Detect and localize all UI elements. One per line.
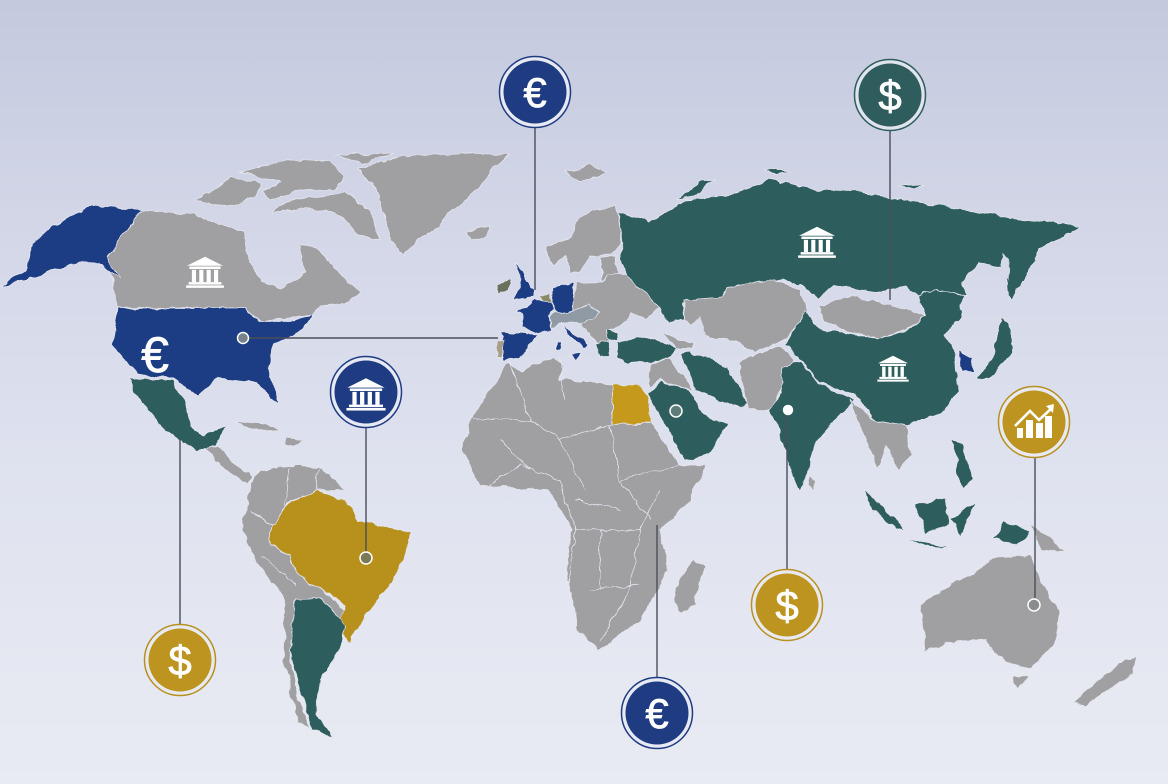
country: Egypt [612,384,652,424]
country: Greenland [358,153,511,256]
African borders [472,358,680,640]
country: China [785,288,965,425]
country: Madagascar [674,560,704,614]
Central Europe [549,305,600,330]
icon: bank on Canada [186,257,224,288]
country: Iran [680,352,747,408]
Sri Lanka [808,475,816,490]
region: North America [0,153,511,484]
country: France [517,300,555,333]
badge: euro bottom: € [645,690,669,737]
continent: Africa [462,358,706,650]
Portugal [497,340,505,358]
Eastern Europe [572,275,658,345]
country: Alaska [0,206,143,287]
Sakhalin gap [1002,252,1009,282]
country: Russia [618,180,1080,322]
region: Oceania [920,555,1136,705]
country: Indonesia [864,490,1030,548]
country: Spain [499,332,538,362]
country: Japan [976,318,1012,380]
country: Turkey [617,337,677,363]
countries: northern and western South America [242,465,346,728]
region: Europe [497,165,693,363]
badge: euro top: € [523,69,547,116]
country: India [768,362,855,492]
country: Mongolia [820,296,925,338]
Russian Arctic islands [678,168,925,200]
Southeast Asia [850,400,912,470]
region: South America [242,465,410,738]
Papua New Guinea [1030,525,1064,552]
connector lines [180,126,1035,678]
Philippines [950,436,974,488]
Caspian Sea gap [688,315,712,360]
icon: euro on USA: € [141,327,169,383]
badge: growth chart [998,386,1070,458]
country: Brazil [270,490,410,642]
badge: dollar left [144,624,216,696]
badge: euro bottom [622,678,692,748]
badge: bank [330,356,402,428]
badge: dollar top [854,60,926,130]
country: Australia [920,555,1060,668]
country: Argentina [290,598,346,738]
Afghanistan and Pakistan [738,345,795,412]
country: Saudi Arabia [647,382,730,460]
country: Korea [958,352,974,372]
Greece and Balkans [595,330,620,357]
Central America and Caribbean [205,420,302,484]
Caucasus [663,332,693,350]
region: Asia [618,168,1080,552]
country: Iceland [566,165,606,182]
icon: bank on Russia [798,227,836,258]
Scandinavia [547,205,622,275]
country: New Zealand [1074,655,1136,705]
region: Africa [462,358,706,650]
country: Canada [107,210,360,322]
South American borders [250,467,320,585]
badge: dollar centre: $ [775,582,799,629]
Benelux [540,294,551,304]
Canadian Arctic islands [195,153,490,240]
badge: dollar centre [752,570,822,640]
badge: dollar left: $ [168,637,192,684]
country: United Kingdom [513,263,534,300]
country: Italy [556,323,588,360]
Ireland [497,279,510,295]
Middle East [648,360,693,392]
Baltic states [600,256,618,282]
badge: dollar top: $ [878,72,902,119]
icon: bank on China [877,356,909,382]
country: Mexico [128,377,226,451]
Central Asia [684,280,808,352]
country: Germany [551,283,576,312]
Tasmania [1012,676,1028,690]
country: United States [112,308,312,405]
badge: euro top [500,56,570,128]
map location dots [238,332,1040,611]
world map [0,153,1136,738]
